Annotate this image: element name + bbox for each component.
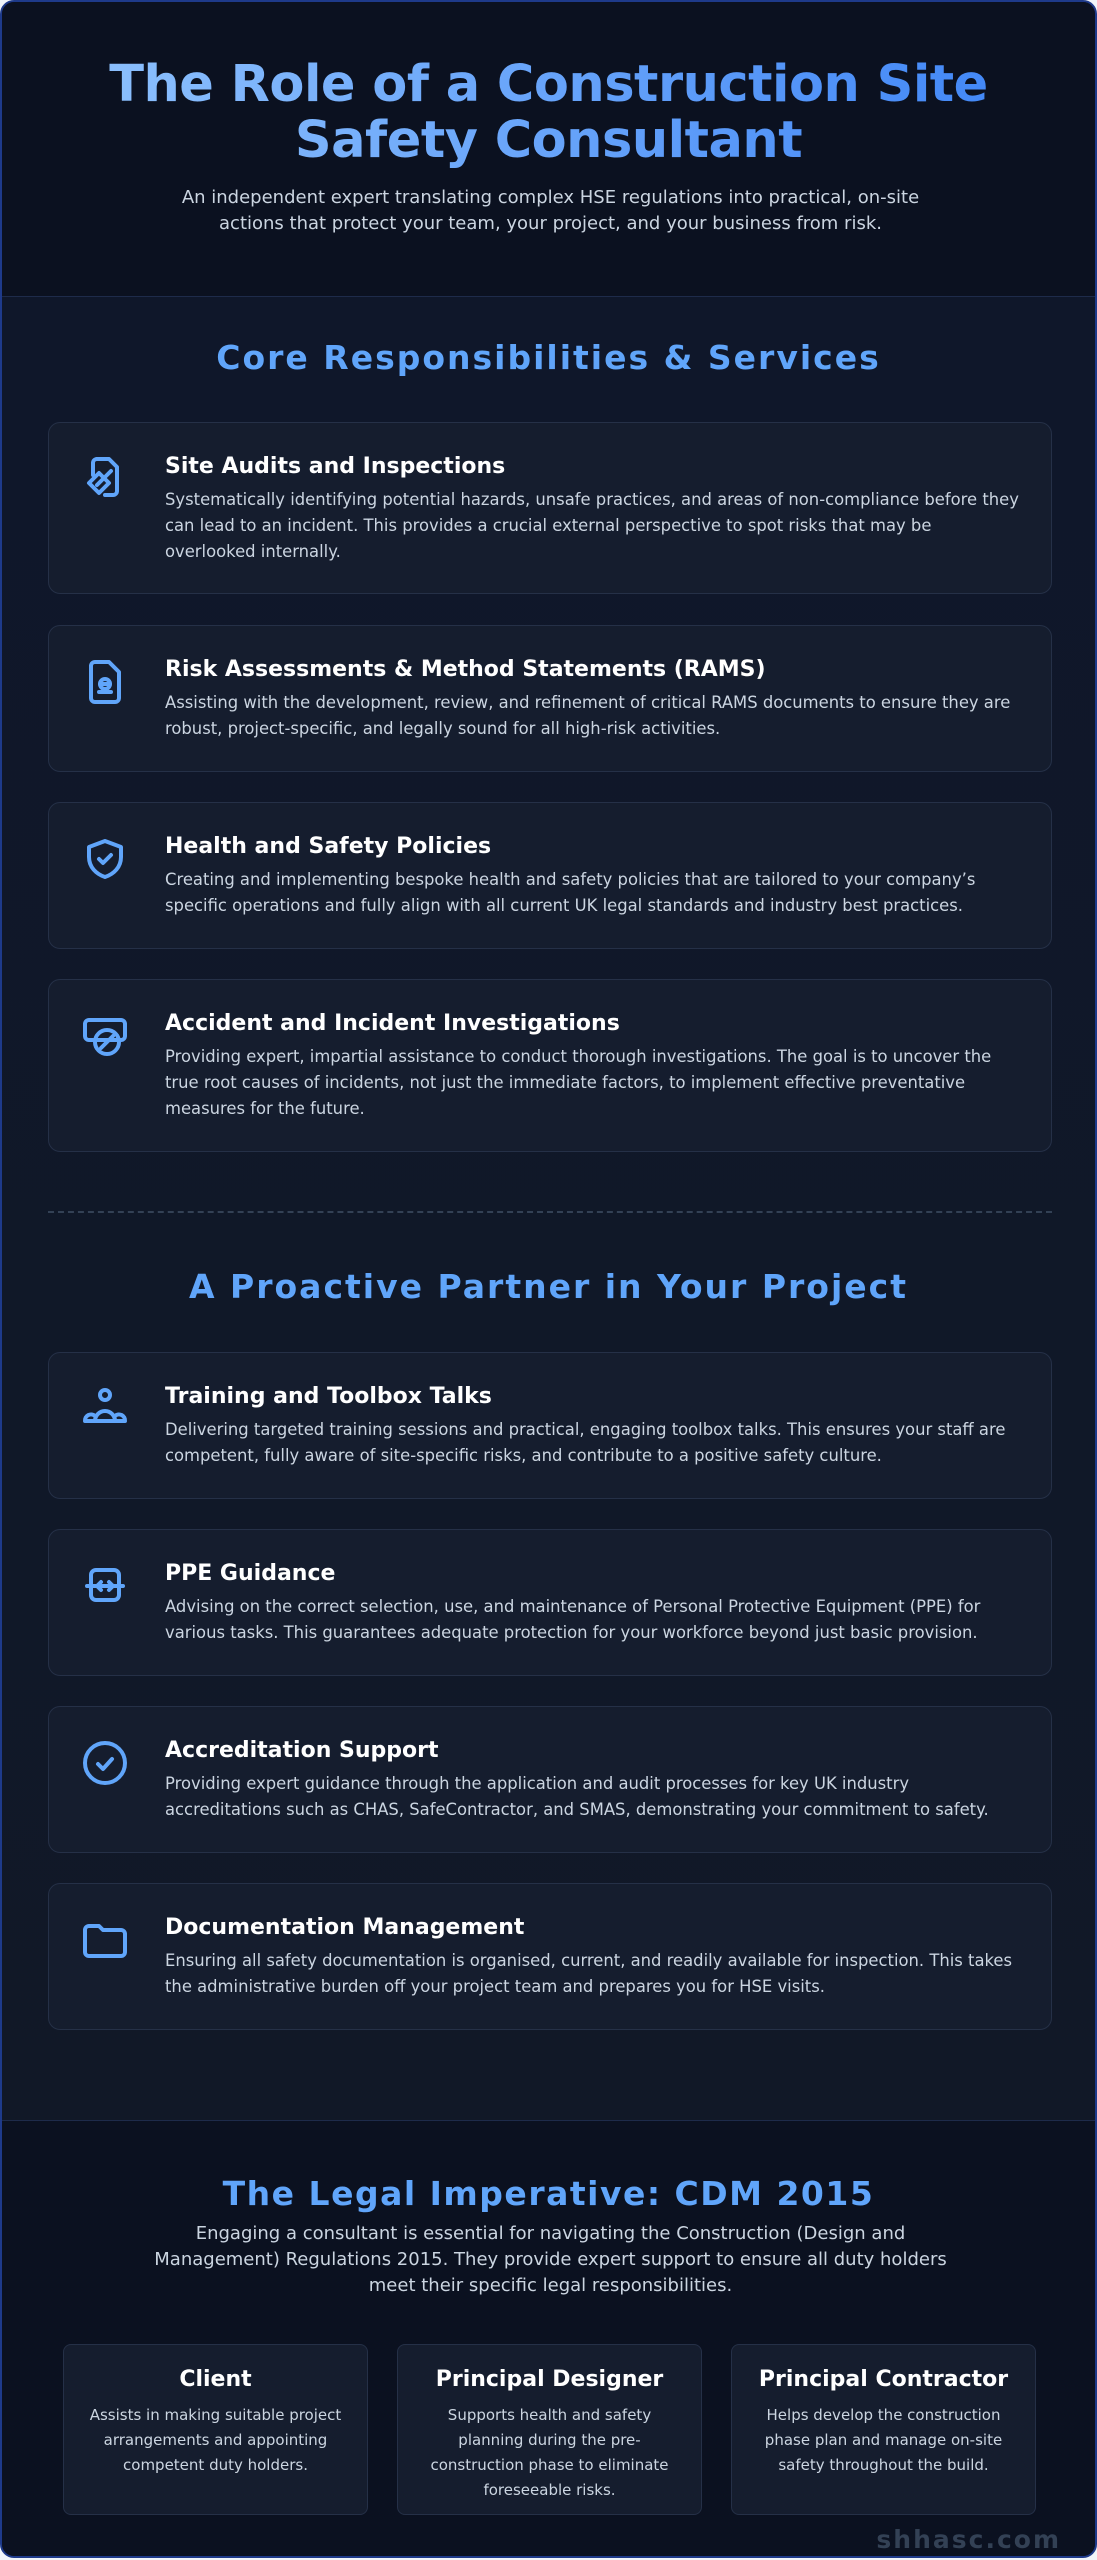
card: accreditation: Accreditation Support	[165, 1738, 439, 1763]
card: accreditation	[48, 1706, 1052, 1853]
card: principal designer: Supports health and safety planning during the pre-construction phase to eliminate foreseeable risks.	[430, 2406, 669, 2499]
card: principal designer	[397, 2344, 702, 2515]
card: RAMS: Risk Assessments & Method Statements (RAMS)	[165, 657, 766, 682]
card: site audits	[48, 422, 1052, 594]
heading: proactive partner: A Proactive Partner in Your Project	[189, 1267, 908, 1306]
card: policies	[48, 802, 1052, 949]
title: The Role of a Construction Site	[109, 55, 988, 114]
card: PPE	[48, 1529, 1052, 1676]
card: principal contractor: Principal Contractor	[759, 2367, 1008, 2392]
watermark: shhasc.com	[876, 2525, 1061, 2554]
card: site audits: Site Audits and Inspections	[165, 454, 505, 479]
subtitle: An independent expert translating complex HSE regulations into practical, on-site actions that protect your team, your project, and your business from risk.	[182, 187, 919, 234]
icon: people	[83, 1388, 127, 1423]
card: site audits: Systematically identifying potential hazards, unsafe practices, and areas of non-compliance before they can lead to an incident. This provides a crucial external perspective to spot risks that may be overlooked internally.	[165, 490, 1019, 561]
icon: shield	[87, 839, 123, 879]
card: principal contractor	[731, 2344, 1036, 2515]
icon: audit	[86, 457, 119, 497]
card: client: Client	[179, 2367, 252, 2392]
card: investigations	[48, 979, 1052, 1152]
card: documentation: Documentation Management	[165, 1915, 524, 1940]
header panel	[2, 2, 1095, 297]
card: client: Assists in making suitable project arrangements and appointing competent duty holders.	[90, 2406, 341, 2474]
card: investigations: Accident and Incident Investigations	[165, 1011, 620, 1036]
card: training: Training and Toolbox Talks	[165, 1384, 492, 1409]
icon: folder	[83, 1924, 127, 1958]
icon: PPE	[85, 1568, 125, 1602]
card: principal designer: Principal Designer	[436, 2367, 663, 2392]
card: training	[48, 1352, 1052, 1499]
panel: CDM 2015	[2, 2120, 1095, 2560]
panel: services	[2, 297, 1095, 2120]
title	[2, 57, 1095, 169]
icon: document	[89, 660, 121, 704]
icon: investigation	[83, 1018, 127, 1056]
card: client	[63, 2344, 368, 2515]
card: policies: Creating and implementing bespoke health and safety policies that are tailored to your company’s specific operations and fully align with all current UK legal standards and industry best practices.	[165, 870, 975, 915]
text: CDM intro: Engaging a consultant is essential for navigating the Construction (Design and Management) Regulations 2015. They provide expert support to ensure all duty holders meet their specific legal responsibilities.	[154, 2223, 947, 2296]
heading: core responsibilities: Core Responsibilities & Services	[216, 338, 881, 377]
card: documentation	[48, 1883, 1052, 2030]
card: training: Delivering targeted training sessions and practical, engaging toolbox talks. This ensures your staff are competent, fully aware of site-specific risks, and contribute to a positive safety culture.	[165, 1420, 1005, 1465]
card: RAMS: Assisting with the development, review, and refinement of critical RAMS documents to ensure they are robust, project-specific, and legally sound for all high-risk activities.	[165, 693, 1010, 738]
card: documentation: Ensuring all safety documentation is organised, current, and readily available for inspection. This takes the administrative burden off your project team and prepares you for HSE visits.	[165, 1951, 1012, 1996]
card: PPE: PPE Guidance	[165, 1561, 335, 1586]
heading: legal imperative: The Legal Imperative: CDM 2015	[223, 2174, 874, 2213]
card: RAMS	[48, 625, 1052, 772]
card: PPE: Advising on the correct selection, use, and maintenance of Personal Protective Equipment (PPE) for various tasks. This guarantees adequate protection for your workforce beyond just basic provision.	[165, 1597, 980, 1642]
title: Safety Consultant	[295, 111, 802, 170]
card: policies: Health and Safety Policies	[165, 834, 491, 859]
icon: check circle	[83, 1741, 127, 1785]
card: investigations: Providing expert, impartial assistance to conduct thorough investigations. The goal is to uncover the true root causes of incidents, not just the immediate factors, to implement effective preventative measures for the future.	[165, 1047, 991, 1118]
card: principal contractor: Helps develop the construction phase plan and manage on-site safety throughout the build.	[765, 2406, 1002, 2474]
card: accreditation: Providing expert guidance through the application and audit processes for key UK industry accreditations such as CHAS, SafeContractor, and SMAS, demonstrating your commitment to safety.	[165, 1774, 989, 1819]
